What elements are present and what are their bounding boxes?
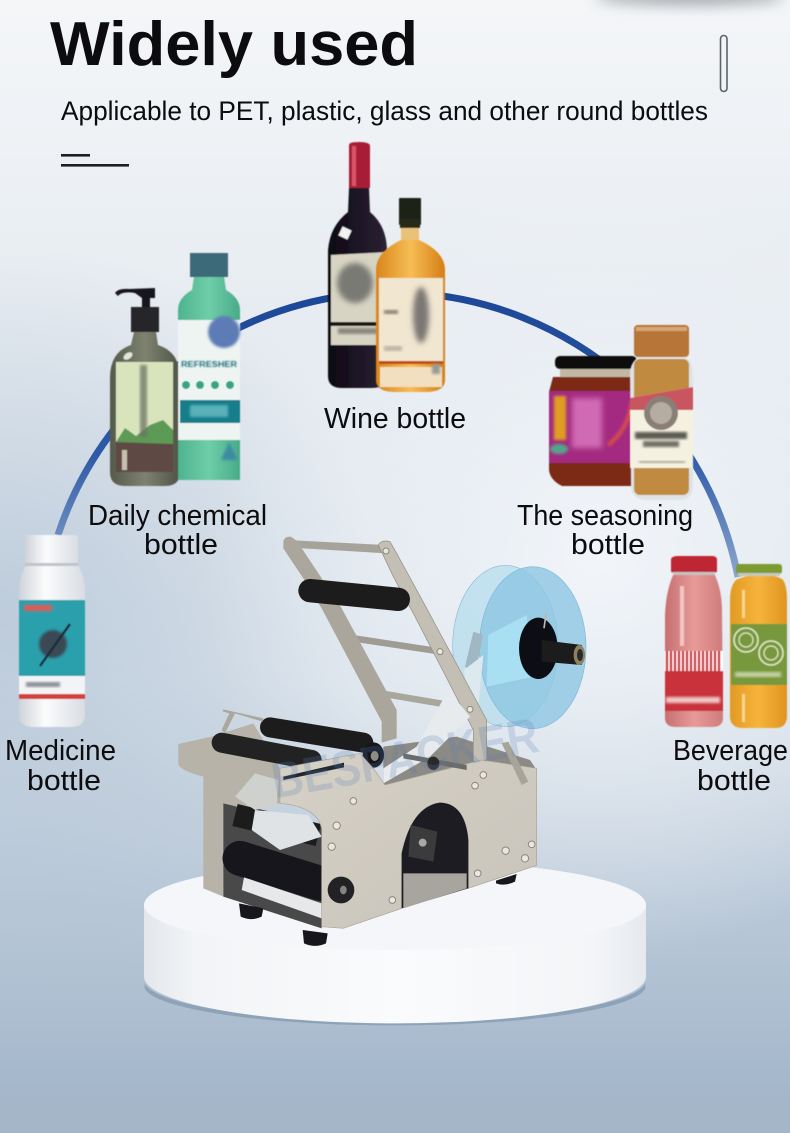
label: medicine bottle: bottle bbox=[27, 765, 101, 797]
icon: spice jar bbox=[630, 325, 693, 500]
short double rule bbox=[61, 154, 129, 167]
label reel bbox=[453, 565, 586, 729]
icon: medicine bottle bbox=[19, 535, 85, 727]
label: medicine bottle: Medicine bbox=[5, 735, 116, 767]
label: daily chemical bottle: bottle bbox=[144, 529, 218, 561]
icon: green bottle: REFRESHER bbox=[181, 360, 237, 369]
upper roller bbox=[310, 591, 398, 599]
knob bbox=[328, 877, 354, 903]
watermark: BESPACKER bbox=[267, 707, 543, 809]
steel slot and label strip bbox=[283, 763, 344, 780]
label: daily chemical bottle bbox=[88, 500, 267, 561]
label: beverage bottle: bottle bbox=[697, 765, 771, 797]
left side plate bbox=[178, 723, 280, 897]
subtitle: Applicable to PET, plastic, glass and other round bottles bbox=[61, 96, 708, 126]
label: seasoning bottle bbox=[517, 500, 693, 561]
decorative capsule top right bbox=[720, 36, 727, 92]
icon: wine bottle bbox=[328, 142, 387, 388]
labeling machine bbox=[178, 537, 586, 946]
label: medicine bottle bbox=[5, 735, 116, 797]
icon: pump bottle bbox=[110, 288, 180, 486]
icon: sauce jar bbox=[549, 356, 637, 486]
white round podium bbox=[144, 860, 646, 1025]
icon: orange juice bottle bbox=[730, 564, 787, 728]
machine feet bbox=[239, 874, 517, 946]
label: daily chemical bottle: Daily chemical bbox=[88, 500, 267, 532]
rivets bbox=[328, 548, 535, 903]
arch interior bbox=[402, 803, 468, 908]
label: seasoning bottle: The seasoning bbox=[517, 500, 693, 532]
title: Widely used bbox=[50, 10, 418, 79]
icon: whisky bottle bbox=[376, 198, 445, 392]
back plate bbox=[383, 737, 537, 787]
interior rollers bbox=[223, 773, 322, 928]
label: beverage bottle bbox=[673, 735, 788, 797]
front steel plate with arch bbox=[280, 753, 537, 928]
top rollers bbox=[222, 709, 384, 768]
label: wine bottle: Wine bottle bbox=[324, 403, 466, 435]
label: seasoning bottle: bottle bbox=[571, 529, 645, 561]
ladder arm bbox=[283, 537, 487, 783]
icon: green bottle bbox=[178, 253, 240, 480]
icon: pink juice bottle bbox=[665, 556, 723, 727]
blue arc connecting bottles bbox=[58, 293, 738, 577]
